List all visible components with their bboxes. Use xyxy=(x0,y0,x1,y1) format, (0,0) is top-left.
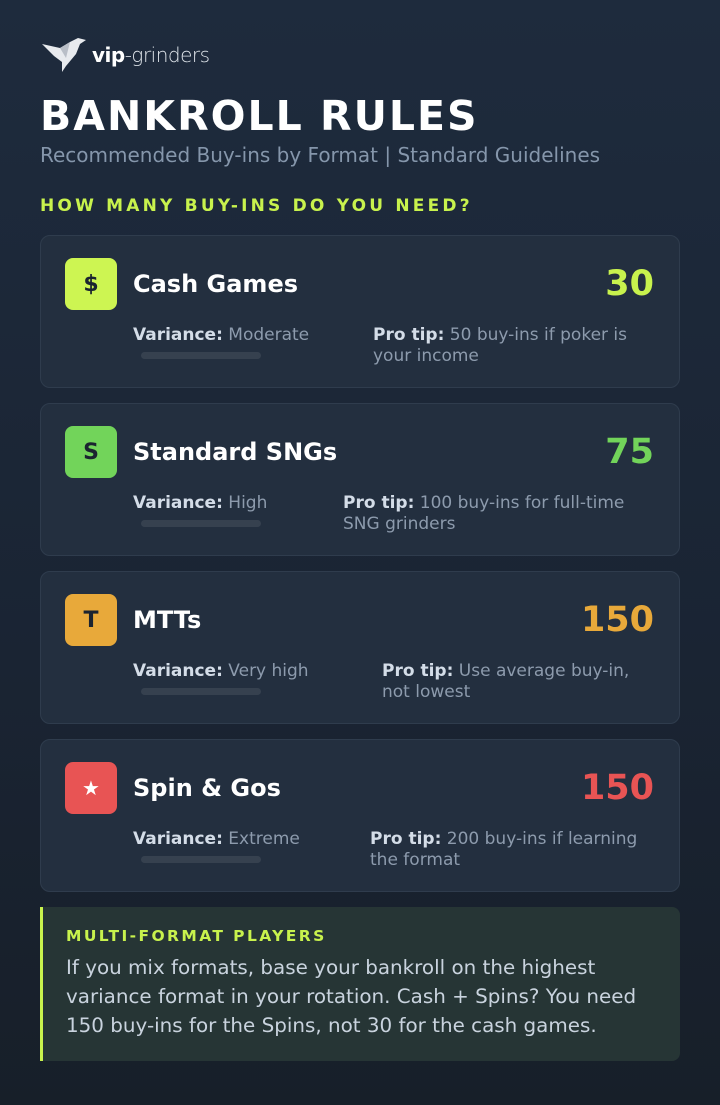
number: 30 xyxy=(605,264,654,304)
icon: S: S xyxy=(83,440,99,464)
logo xyxy=(42,38,210,72)
number: 75 xyxy=(605,432,654,472)
tip: Pro tip: 100 buy-ins for full-time xyxy=(343,493,624,513)
icon: star: ★ xyxy=(82,776,100,800)
icon: dollar xyxy=(65,258,117,310)
number: 150 xyxy=(581,600,654,640)
tip xyxy=(343,493,624,534)
subtitle: Recommended Buy-ins by Format | Standard Guidelines xyxy=(40,143,600,167)
callout text: 150 buy-ins for the Spins, not 30 for the cash games. xyxy=(66,1014,597,1037)
panel: standard sngs xyxy=(40,403,680,556)
heading: Spin & Gos xyxy=(133,774,281,802)
section heading: HOW MANY BUY-INS DO YOU NEED? xyxy=(40,196,473,216)
tip: Pro tip: 50 buy-ins if poker is xyxy=(373,325,627,345)
title: BANKROLL RULES xyxy=(40,92,479,140)
heading: Cash Games xyxy=(133,270,298,298)
heading: MTTs xyxy=(133,606,201,634)
tip xyxy=(382,661,629,702)
panel: spin & gos xyxy=(40,739,680,892)
icon: T: T xyxy=(83,608,98,632)
icon: dollar: $ xyxy=(83,272,99,296)
number: 150 xyxy=(581,768,654,808)
tip xyxy=(373,325,627,366)
icon: T xyxy=(65,594,117,646)
heading: Standard SNGs xyxy=(133,438,337,466)
callout text xyxy=(66,956,636,1037)
logo: vip-grinders xyxy=(92,43,210,67)
callout heading: MULTI-FORMAT PLAYERS xyxy=(66,927,327,945)
tip: your income xyxy=(373,346,479,366)
variance: Variance: Moderate xyxy=(133,325,309,345)
variance: Variance: Very high xyxy=(133,661,309,681)
panel: cash games xyxy=(40,235,680,388)
tip: Pro tip: Use average buy-in, xyxy=(382,661,629,681)
variance: Variance: Extreme xyxy=(133,829,300,849)
tip: SNG grinders xyxy=(343,514,455,534)
tip: not lowest xyxy=(382,682,470,702)
tip: the format xyxy=(370,850,460,870)
callout text: If you mix formats, base your bankroll on the highest xyxy=(66,956,595,979)
callout: multi-format xyxy=(40,907,680,1061)
callout text: variance format in your rotation. Cash + Spins? You need xyxy=(66,985,636,1008)
icon: star xyxy=(65,762,117,814)
variance: Variance: High xyxy=(133,493,267,513)
tip xyxy=(370,829,637,870)
panel: mtts xyxy=(40,571,680,724)
tip: Pro tip: 200 buy-ins if learning xyxy=(370,829,637,849)
icon: S xyxy=(65,426,117,478)
